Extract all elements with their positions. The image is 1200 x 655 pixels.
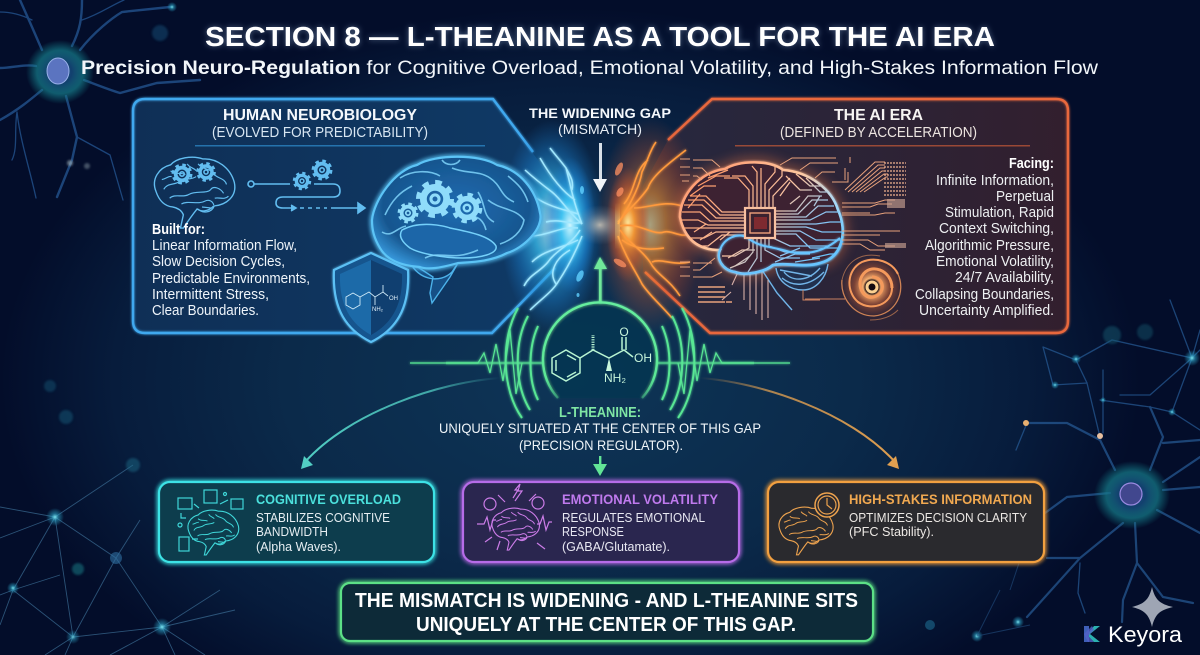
- callout frame: [341, 583, 873, 641]
- label: the widening gap: (MISMATCH): [558, 121, 642, 137]
- arrow: down into gap: [593, 143, 607, 192]
- panel: the AI era: [643, 99, 1068, 333]
- neuron network: right: [925, 300, 1200, 642]
- callout text: [355, 590, 858, 636]
- ring around molecule: [543, 302, 657, 398]
- text block: facing: Uncertainty Amplified.: [919, 303, 1054, 319]
- arrow: down to emotional volatility: [593, 456, 607, 476]
- icon: brain with clock: [779, 493, 839, 555]
- icon: sparkle: [1132, 587, 1173, 627]
- panel frame: the AI era: [645, 99, 1068, 333]
- panel fill: human neurobiology: [133, 99, 557, 333]
- panel: human neurobiology: [133, 99, 557, 333]
- body: cognitive overload: [256, 510, 390, 554]
- icon: L-theanine shield: OH: [389, 296, 398, 302]
- text block: built for: Slow Decision Cycles,: [152, 254, 285, 270]
- neuron network: top left: [0, 0, 200, 200]
- text block: facing: Stimulation, Rapid: [945, 205, 1054, 221]
- burst: central energy collision: [500, 117, 704, 333]
- label: the widening gap: THE WIDENING GAP: [529, 105, 671, 121]
- icon: brain with documents: [178, 490, 243, 555]
- text block: built for: [152, 222, 310, 319]
- body: emotional volatility: REGULATES EMOTIONAL: [562, 510, 705, 525]
- title: SECTION 8 — L-THEANINE AS A TOOL FOR THE AI ERA: [205, 21, 995, 52]
- heading: cognitive overload: COGNITIVE OVERLOAD: [256, 492, 401, 507]
- text block: facing: Emotional Volatility,: [936, 254, 1054, 270]
- text block: L-theanine: UNIQUELY SITUATED AT THE CENTER OF THIS GAP: [439, 420, 761, 436]
- icon: L-theanine molecule: OH: [634, 351, 652, 365]
- text block: facing: Algorithmic Pressure,: [925, 238, 1054, 254]
- subheading: evolved for predictability: (EVOLVED FOR PREDICTABILITY): [212, 125, 428, 141]
- subheading: defined by acceleration: (DEFINED BY ACCELERATION): [780, 125, 977, 141]
- lower lobe glow: [719, 236, 842, 274]
- body: emotional volatility: [562, 510, 705, 554]
- subtitle: Precision Neuro-Regulation for Cognitive Overload, Emotional Volatility, and High-Stakes Information Flow: [81, 57, 1099, 79]
- temporal lobe: [400, 224, 496, 258]
- waveform: L-theanine signal: [410, 308, 790, 418]
- card: emotional volatility: [463, 482, 739, 562]
- circuit traces in brain: [682, 164, 846, 272]
- text block: built for: Clear Boundaries.: [152, 303, 259, 319]
- icon: L-theanine shield: NH₂: [372, 307, 384, 313]
- neuron network: bottom left: [0, 380, 235, 655]
- cerebrum: [372, 157, 541, 268]
- diagram: circuit traces around AI brain: [680, 157, 906, 302]
- icon: brain with lightning: [477, 484, 552, 550]
- callout text: UNIQUELY AT THE CENTER OF THIS GAP.: [416, 614, 796, 636]
- text block: facing: Collapsing Boundaries,: [915, 287, 1054, 303]
- text block: built for: Intermittent Stress,: [152, 287, 269, 303]
- text block: facing: Facing:: [1009, 156, 1054, 172]
- text block: facing: Perpetual: [996, 189, 1054, 205]
- brain halo: [680, 162, 843, 274]
- heading: high-stakes information: HIGH-STAKES INFORMATION: [849, 492, 1032, 507]
- icon: L-theanine shield: [334, 253, 408, 342]
- text block: facing: Context Switching,: [939, 221, 1054, 237]
- heading: human neurobiology: HUMAN NEUROBIOLOGY: [223, 107, 417, 124]
- card: cognitive overload: [159, 482, 434, 562]
- text block: built for: Linear Information Flow,: [152, 238, 297, 254]
- body: emotional volatility: RESPONSE: [562, 524, 624, 539]
- brain body: [680, 162, 843, 274]
- body: cognitive overload: (Alpha Waves).: [256, 539, 341, 554]
- callout: conclusion: [341, 583, 873, 641]
- heading: emotional volatility: EMOTIONAL VOLATILITY: [562, 492, 718, 507]
- text block: facing: Infinite Information,: [936, 173, 1054, 189]
- illustration: circuit AI brain: [680, 162, 846, 320]
- cerebellum and stem: [410, 262, 458, 303]
- text block: L-theanine: [439, 404, 761, 453]
- panel fill: the AI era: [643, 99, 1068, 333]
- body: high-stakes information: (PFC Stability).: [849, 524, 934, 539]
- body: high-stakes information: [849, 510, 1027, 539]
- icon: process flow with gears: [248, 161, 365, 213]
- text block: facing: [915, 156, 1054, 319]
- body: cognitive overload: BANDWIDTH: [256, 524, 328, 539]
- text block: facing: 24/7 Availability,: [955, 270, 1054, 286]
- arrow: up from molecule: [594, 257, 607, 304]
- text block: L-theanine: (PRECISION REGULATOR).: [519, 437, 683, 453]
- icon: L-theanine molecule: NH₂: [604, 371, 626, 385]
- icon: spiral vortex: [842, 255, 902, 320]
- logo: Keyora: Keyora: [1108, 622, 1183, 647]
- icon: L-theanine molecule: O: [619, 325, 629, 339]
- text block: built for: Built for:: [152, 222, 205, 238]
- curved arrow: to cognitive overload: [301, 378, 500, 469]
- body: emotional volatility: (GABA/Glutamate).: [562, 539, 670, 554]
- cerebellum and stem: [762, 264, 828, 310]
- card frame: emotional volatility: [463, 482, 739, 562]
- callout text: THE MISMATCH IS WIDENING - AND L-THEANINE SITS: [355, 590, 858, 612]
- heading: the AI era: THE AI ERA: [834, 107, 923, 124]
- card: high-stakes information: [768, 482, 1044, 562]
- label: the widening gap: [529, 105, 671, 137]
- panel frame: human neurobiology: [133, 99, 555, 333]
- icon: L-theanine molecule: [543, 302, 657, 398]
- body: cognitive overload: STABILIZES COGNITIVE: [256, 510, 390, 525]
- curved arrow: to high-stakes information: [700, 378, 899, 469]
- text block: built for: Predictable Environments,: [152, 271, 310, 287]
- card frame: cognitive overload: [159, 482, 434, 562]
- illustration: blue human brain with gears: [372, 157, 541, 303]
- text block: L-theanine: L-THEANINE:: [559, 404, 641, 421]
- card frame: high-stakes information: [768, 482, 1044, 562]
- icon: small brain with gears: [154, 157, 235, 228]
- chip: [745, 208, 775, 238]
- body: high-stakes information: OPTIMIZES DECISION CLARITY: [849, 510, 1027, 525]
